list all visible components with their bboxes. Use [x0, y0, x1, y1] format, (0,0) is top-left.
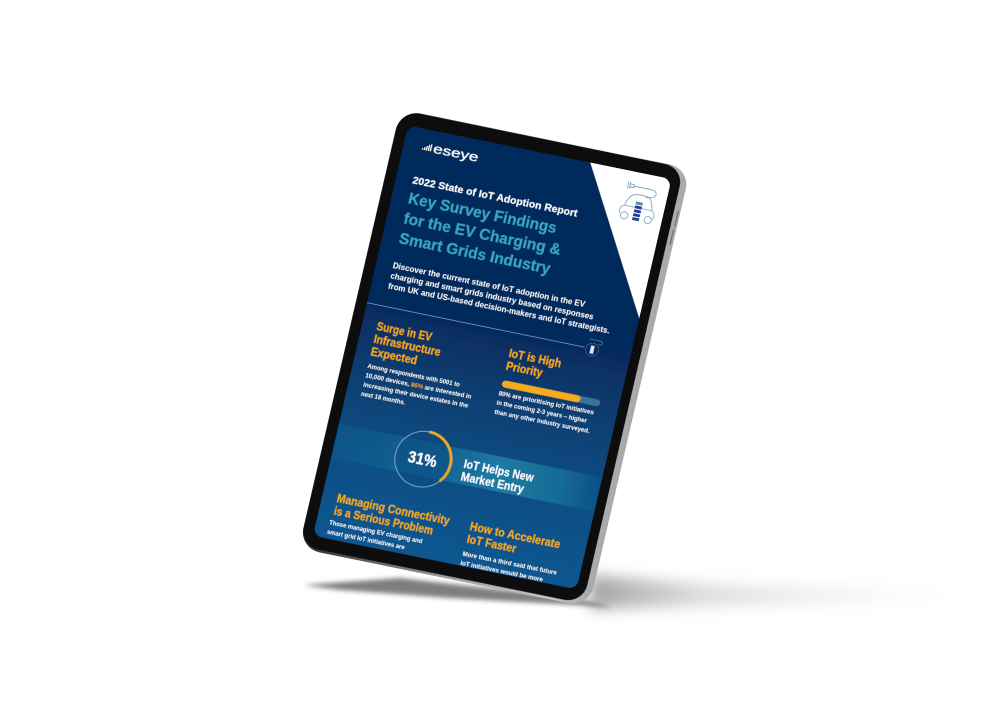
section: how to accelerate IoT: successful if they had support [457, 569, 545, 594]
section: surge in EV infrastructure: Expected [369, 347, 418, 368]
band: IoT helps new market entry [331, 424, 602, 512]
screen [310, 125, 672, 600]
section: how to accelerate IoT: How to Accelerate [469, 521, 561, 551]
section: how to accelerate IoT: IoT Faster [466, 534, 518, 556]
intro paragraph: from UK and US-based decision-makers and IoT strategists. [387, 282, 611, 336]
section: surge in EV infrastructure: Among respondents with 5001 to [367, 363, 460, 389]
section: surge in EV infrastructure [360, 322, 472, 408]
section: managing connectivity [326, 493, 450, 555]
section: IoT is high priority: IoT is High [508, 348, 562, 371]
main heading: Key Survey Findings [406, 191, 558, 237]
section: surge in EV infrastructure: Infrastructure [372, 334, 442, 359]
ground shadow [303, 575, 970, 609]
section: managing connectivity: is a Serious Problem [333, 506, 434, 537]
section: managing connectivity: smart grid IoT initiatives are [326, 529, 406, 551]
section: IoT is high priority: Priority [505, 361, 544, 380]
progress bar 80% [501, 380, 601, 407]
tablet body [299, 109, 690, 607]
section: surge in EV infrastructure: increasing their device estates in the [362, 382, 469, 410]
section: IoT is high priority: in the coming 2-3 years – higher [496, 400, 588, 425]
band heading: IoT Helps New [462, 459, 535, 484]
logo: eseye [432, 141, 480, 165]
bezel [300, 110, 684, 604]
main heading: for the EV Charging & [402, 211, 562, 259]
tablet [299, 109, 690, 607]
main heading: Smart Grids Industry [397, 231, 552, 278]
band heading: Market Entry [460, 471, 526, 496]
section: surge in EV infrastructure: 10,000 devices, 86% are interested in [365, 372, 472, 401]
section: IoT is high priority: 80% are prioritising IoT initiatives [498, 391, 595, 417]
report title: 2022 State of IoT Adoption Report [411, 174, 579, 220]
band heading [460, 459, 535, 497]
intro paragraph: Discover the current state of IoT adoption in the EV [392, 261, 587, 309]
white corner triangle [590, 162, 670, 318]
section: IoT is high priority: than any other industry surveyed. [494, 409, 590, 435]
logo [422, 144, 478, 162]
section: how to accelerate IoT [460, 521, 560, 582]
section: IoT is high priority [494, 348, 600, 433]
screen background [313, 125, 672, 590]
section: surge in EV infrastructure: next 18 months. [360, 391, 406, 407]
donut chart 31% [394, 430, 453, 488]
section: managing connectivity: Those managing EV charging and [328, 519, 423, 545]
intro paragraph: charging and smart grids industry based on responses [390, 271, 595, 322]
main heading [397, 191, 567, 279]
section: managing connectivity: struggling to manage multiple [324, 538, 409, 562]
section: how to accelerate IoT: More than a third said that future [462, 551, 558, 577]
icon: EV charging plug and car [618, 182, 657, 224]
section: managing connectivity: Managing Connectivity [335, 493, 451, 528]
small charging icon [584, 339, 603, 358]
section: how to accelerate IoT: IoT initiatives would be more [460, 560, 544, 584]
side buttons [669, 211, 679, 245]
section: surge in EV infrastructure: Surge in EV [375, 321, 433, 344]
donut chart 31%: 31% [406, 448, 439, 471]
